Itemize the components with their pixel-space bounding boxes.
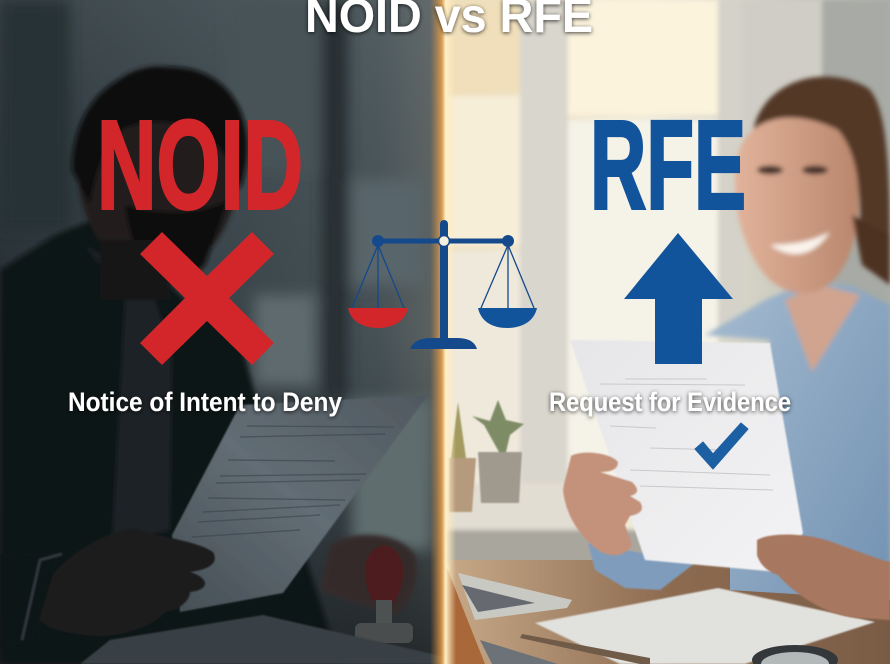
document held by woman — [570, 340, 803, 572]
label: Notice of Intent to Deny: Notice of Intent to Deny — [68, 387, 342, 417]
desk paper — [80, 615, 445, 664]
stamp in right hand — [320, 535, 417, 643]
woman's sleeve — [588, 543, 695, 590]
document held by man — [172, 395, 428, 612]
heading: RFE: RFE — [590, 94, 746, 236]
woman — [705, 77, 890, 640]
panel: NOID dark photo scene — [0, 0, 445, 664]
potted plants — [449, 400, 524, 512]
icon: red X — [140, 232, 274, 365]
man silhouette — [0, 66, 340, 664]
icon: blue up arrow — [624, 233, 733, 364]
desk and laptop — [445, 560, 890, 664]
panel: RFE bright photo scene — [445, 0, 890, 664]
blue pan — [478, 308, 537, 328]
red pan — [348, 308, 408, 328]
label: Request for Evidence: Request for Evidence — [549, 387, 791, 417]
icon: balance scale — [348, 220, 537, 349]
heading: NOID: NOID — [97, 94, 303, 236]
glowing centre divider — [430, 0, 456, 664]
icon: blue check mark — [695, 423, 748, 469]
man's hands — [20, 528, 216, 641]
woman's hands — [563, 453, 890, 620]
